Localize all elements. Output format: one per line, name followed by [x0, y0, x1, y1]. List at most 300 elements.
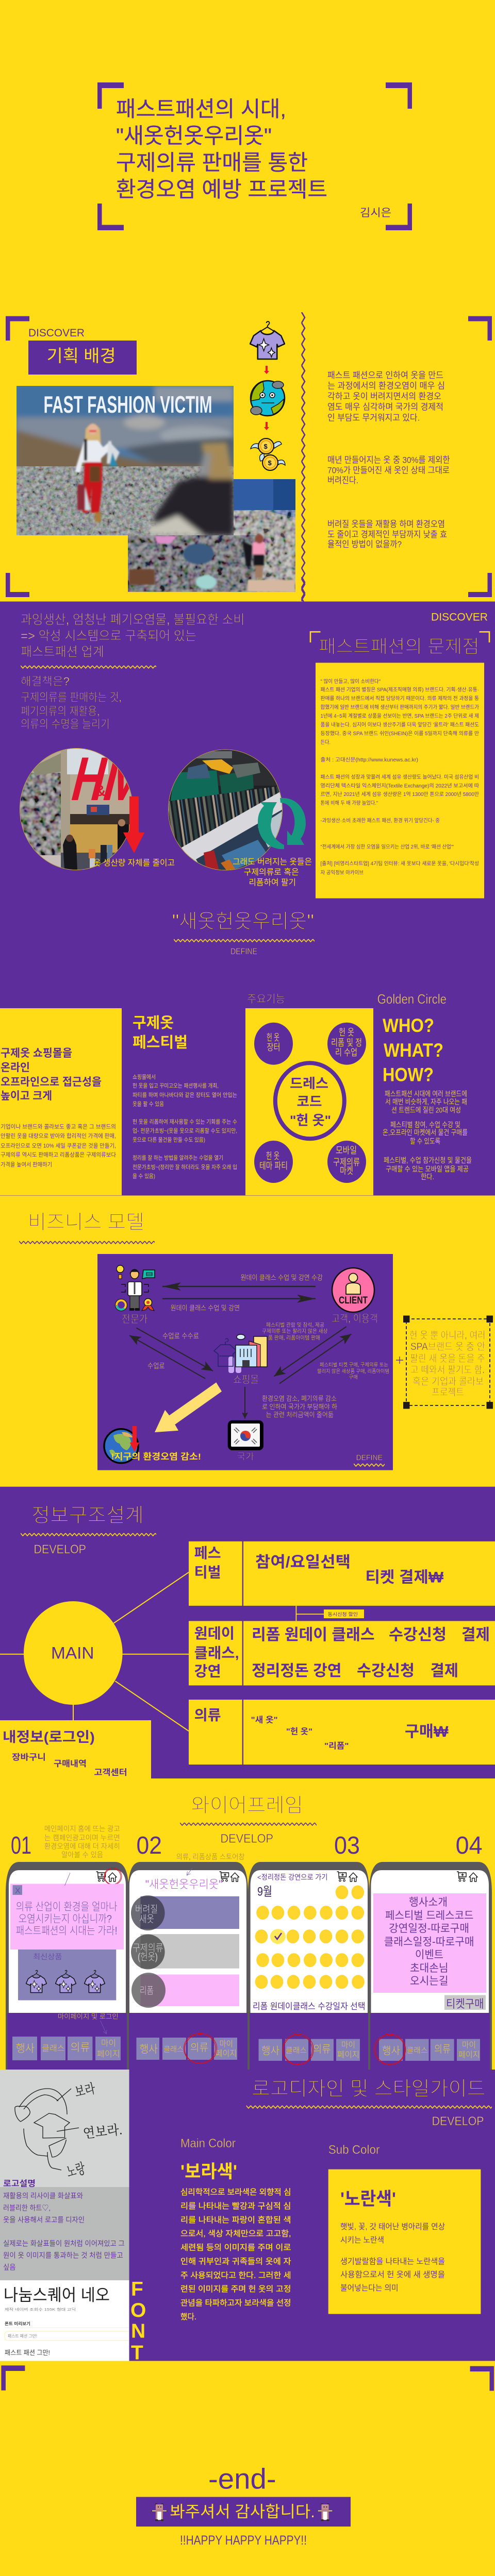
caption: resell clothes	[233, 857, 312, 887]
photo circle: H&M store: M	[97, 744, 155, 814]
panel: logo description: 싶음	[3, 2263, 16, 2271]
arrow: earth to money	[264, 422, 269, 430]
feature bubble: reform class: 헌 옷	[339, 1027, 354, 1038]
tab bar: 클래스	[42, 2044, 65, 2053]
text: overproduction heading: 과잉생산, 엄청난 폐기오염물, 불필요한 소비	[21, 613, 244, 627]
icon: cart	[457, 1872, 466, 1882]
highlight scribble	[281, 2033, 315, 2066]
panel: logo description: 로고설명	[3, 2179, 36, 2188]
category: used clothes: (헌옷)	[138, 1952, 158, 1963]
category: used clothes: 구제의류	[133, 1942, 163, 1954]
who text	[385, 1090, 467, 1114]
tab bar: 의류	[70, 2042, 90, 2054]
tab bar: 클래스	[286, 2046, 307, 2055]
ad popup: 패스트패션의 시대는 가라!	[16, 1925, 118, 1937]
panel heading	[1, 1047, 102, 1102]
category: used clothes	[131, 1934, 239, 1969]
heading: logo and style guide: 로고디자인 및 스타일가이드	[252, 2078, 486, 2100]
tab bar: 의류	[434, 2043, 451, 2055]
flow label: tuition: 수업료	[147, 1362, 165, 1370]
festival heading	[133, 1014, 188, 1051]
main color block: 련된 이미지를 주며 헌 옷의 고정	[180, 2284, 291, 2294]
row: one day class and lecture: 정리정돈 강연	[252, 1663, 341, 1680]
row: clothing: "리폼"	[324, 1741, 349, 1751]
screen numbers: 01	[11, 1832, 31, 1859]
icon: expert	[116, 1265, 155, 1311]
screen numbers: 02	[136, 1832, 162, 1859]
icon: earth	[104, 1429, 138, 1463]
annotation: campaign ad: 메인페이지 홈에 뜨는 광고	[44, 1825, 120, 1833]
annotation: storefront: 의류, 리폼상품 스토어창	[176, 1853, 245, 1861]
heading: business model: 비즈니스 모델	[28, 1212, 144, 1233]
text: question: 버려질 옷들을 재활용 하며 환경오염	[327, 519, 445, 529]
text: discarded clothes statistic: 70%가 만들어진 새 옷인 상태 그대로	[327, 466, 450, 476]
feature bubble: market	[254, 1023, 293, 1065]
icon: cart	[220, 1872, 229, 1882]
author name: 김시은	[360, 207, 391, 219]
ad popup: 오염시키는지 아십니까?	[19, 1913, 112, 1925]
label: customer: 고객, 이용객	[332, 1313, 378, 1325]
connector: simultaneous discount	[296, 1606, 364, 1621]
row: one day class and lecture: 수강신청	[389, 1626, 447, 1643]
panel: logo description: 러블리한 하트♡,	[3, 2204, 51, 2212]
panel: my info login: 구매내역	[54, 1759, 87, 1769]
callout: additional sourcing: 고 떼와서 팔기도 함.	[410, 1364, 485, 1376]
category: discarded new clothes: 새옷	[139, 1913, 154, 1925]
connector lines from main	[0, 1572, 189, 1731]
tab bar: 페이지	[97, 2049, 120, 2059]
how text	[384, 1156, 472, 1181]
festival body text: 헌 옷을 입고 꾸미고오는 패션행사를 개최,	[133, 1082, 219, 1089]
panel body text: 기업이나 브랜드와 콜라보도 좋고 혹은 그 브랜드의	[1, 1123, 116, 1130]
callout: additional sourcing: SPA브랜드 옷 중 안	[410, 1341, 485, 1352]
tab bar: 클래스	[163, 2045, 184, 2054]
icon: recycle arrows	[258, 798, 306, 849]
phone: calendar screen	[248, 1862, 369, 2070]
sub color block: '노란색'	[340, 2189, 396, 2209]
festival body text: 옷으로 다른 물건을 만들 수도 있음)	[133, 1137, 205, 1143]
callout: additional sourcing: 프로젝트	[432, 1387, 464, 1398]
main color block: 세련됨 등의 이미지를 주며 이로	[180, 2243, 291, 2252]
key features label: 주요기능	[247, 993, 285, 1005]
flow label: festival offer: 품 판매, 리폼아이템 판매	[268, 1335, 320, 1341]
how text: 페스티벌, 수업 참가신청 및 물건을	[384, 1156, 472, 1164]
callout: additional sourcing: 혹은 기업과 콜라보	[412, 1376, 484, 1387]
text: discarded clothes statistic	[327, 455, 450, 485]
tab bar	[379, 2039, 480, 2061]
panel: font preview: 패스트 패션 그만!	[5, 2349, 50, 2357]
row: one day class and lecture: 리폼 원데이 클래스	[252, 1626, 375, 1643]
article text one: 품을 내놓는다. 심지어 이보다 생산주기를 더욱 앞당긴 '울트라' 패스트 패션도	[321, 722, 479, 728]
arrow: customer to mall	[274, 1327, 346, 1376]
icon: home	[108, 1873, 117, 1882]
panel heading: 구제옷 쇼핑몰을	[1, 1047, 72, 1059]
callout: additional sourcing: 헌 옷 뿐 아니라, 여러	[409, 1330, 486, 1341]
icon: korean flag	[228, 1420, 263, 1450]
phone: event screen	[369, 1862, 492, 2070]
text: overproduction heading	[21, 613, 244, 659]
icon: home	[349, 1873, 357, 1882]
photo: fast fashion victim	[16, 386, 234, 535]
text: fast fashion pollution: 염도 매우 심각하며 국가의 경제적	[327, 402, 443, 412]
screen numbers	[11, 1832, 483, 1859]
event menu	[373, 1893, 486, 1993]
how text: 한다.	[421, 1173, 434, 1181]
sub color block: 사용함으로서 헌 옷에 새 생명을	[340, 2270, 445, 2279]
panel: online offline shopping mall	[0, 1008, 122, 1195]
text: solution: 폐기의류의 재활용,	[21, 705, 100, 718]
row: festival: 티켓 결제₩	[365, 1569, 444, 1586]
ad popup: 의류 산업이 환경을 얼마나	[16, 1901, 118, 1913]
cover title: 구제의류 판매를 통한	[116, 150, 308, 175]
text: question: 도 줄이고 경제적인 부담까지 낮출 효	[327, 530, 447, 539]
panel: business model diagram	[97, 1254, 393, 1470]
develop label: DEVELOP	[34, 1543, 86, 1556]
panel: my info login: 고객센터	[94, 1768, 127, 1777]
article text two: 영리단체 텍스타일 익스체인지(Textile Exchange)의 2022년 보고서에 따	[321, 783, 479, 789]
main color block: 주 사용되었다고 한다. 그러한 세	[180, 2270, 291, 2280]
photo circle: H&M store	[20, 748, 132, 870]
article text two: 패스트 패션의 성장과 맞물려 세계 섬유 생산량도 늘어났다. 미국 섬유산업 비	[321, 773, 479, 780]
text: question	[327, 519, 447, 549]
article text three: 자 공익정보 아카이브	[321, 870, 364, 876]
highlight scribble	[373, 2033, 407, 2066]
vertical word: font: F	[131, 2278, 143, 2300]
annotation arrow	[187, 1868, 192, 1875]
center ring: dress code: 드레스	[290, 1076, 328, 1091]
panel: golden circle: WHAT?	[384, 1040, 443, 1061]
center ring: dress code: "헌 옷"	[290, 1113, 331, 1128]
article text one: 합했기에 일반 브랜드에 비해 생산부터 판매까지의 주기가 짧다. 일반 브랜드가	[321, 704, 479, 710]
arrow: expert to mall	[136, 1328, 213, 1371]
center ring: dress code: 코드	[297, 1094, 322, 1109]
handwritten labels: 노랑	[65, 2160, 87, 2181]
text: solution: 해결책은?	[21, 675, 70, 688]
article text three: "전세계에서 가장 심한 오염을 일으키는 산업 2위, 바로 '패션 산업'"	[321, 843, 454, 850]
phone: home screen	[6, 1862, 129, 2070]
festival body text: 옷을 팔 수 있음	[133, 1100, 164, 1107]
flow label: class attendance: 원데이 클래스 수업 및 강연 수강	[240, 1274, 323, 1282]
panel: font preview: 제작 네이버 조회수 155K 형태 고딕	[5, 2307, 76, 2312]
plus sign	[396, 1357, 403, 1364]
callout: additional sourcing	[403, 1316, 493, 1409]
vertical word: font: T	[131, 2342, 143, 2364]
text: discarded clothes statistic: 버려진다.	[327, 476, 358, 485]
panel body text: 오프라인으로 오면 10% 세일 쿠폰같은 것을 만들기,	[1, 1142, 116, 1149]
section: information architecture	[0, 1487, 495, 1778]
month label: 9월	[257, 1885, 272, 1899]
panel: logo description	[0, 2179, 129, 2280]
flow label: festival offer: 구제의류 또는 팔리지 않은 새상	[262, 1328, 328, 1334]
flow label: reduced cost	[262, 1395, 337, 1419]
event menu: 초대손님	[410, 1962, 449, 1974]
new products	[18, 1950, 116, 2000]
handwritten labels: 연보라.	[82, 2122, 123, 2141]
row: festival: 페스	[194, 1545, 221, 1561]
article text three: [출처] [비영리스타트업] 4기팀 인터뷰: 새 옷보다 새로운 옷을, '다시입다'작성	[321, 860, 479, 867]
who text: 션 트렌드에 질린 20대 여성	[391, 1106, 461, 1114]
tab bar: 의류	[313, 2043, 331, 2055]
article text one: 패스트 패션 기업의 별칭은 SPA(제조직매형 의류) 브랜드다. 기획·생산·유통·	[321, 686, 479, 693]
label: shopping mall: 쇼핑몰	[233, 1374, 259, 1386]
icon: client: CLIENT	[339, 1295, 368, 1306]
sub color block: 햇빛, 꽃, 갓 태어난 병아리를 연상	[340, 2222, 445, 2231]
text: fast fashion pollution: 패스트 패션으로 인하여 옷을 만드	[327, 370, 443, 380]
zigzag rule	[21, 665, 156, 669]
panel: golden circle	[383, 1015, 472, 1181]
festival body text: 업- 전문가초빙~(옷을 옷으로 리폼할 수도 있지만,	[133, 1128, 237, 1134]
category: discarded new clothes	[131, 1895, 239, 1930]
what text: 할 수 있도록	[410, 1137, 440, 1145]
icon: flying coins: $	[268, 459, 272, 467]
service name title: "새옷헌옷우리옷"	[172, 911, 314, 933]
row: clothing: 구매₩	[405, 1723, 449, 1740]
feature bubble: theme party	[254, 1141, 293, 1183]
happy line: !!HAPPY HAPPY HAPPY!!	[180, 2533, 307, 2548]
row: one day class and lecture: 강연	[194, 1664, 221, 1680]
panel: font preview: 나눔스퀘어 네오	[4, 2286, 110, 2304]
arrow: mall to earth	[155, 1382, 222, 1432]
main color block: 인해 귀부인과 귀족들의 옷에 자	[180, 2257, 291, 2266]
callout: additional sourcing: 팔린 새 옷을 돈을 주	[410, 1353, 485, 1364]
vertical word: font: O	[130, 2299, 146, 2321]
article text one: 1년에 4~5회 계절별로 상품을 선보이는 반면, SPA 브랜드는 2주 단위로 새 제	[321, 713, 479, 719]
zigzag rule	[21, 1533, 156, 1536]
row: festival: 참여/요일선택	[255, 1554, 351, 1571]
highlight scribble	[183, 2032, 218, 2065]
panel: font preview: 패스트 패션 그만!	[8, 2333, 37, 2338]
festival body text: 쇼핑몰에서	[133, 1074, 156, 1080]
what text	[383, 1121, 468, 1145]
event menu: 이벤트	[415, 1949, 443, 1961]
panel: my info login: 장바구니	[12, 1753, 46, 1762]
tab bar: 페이지	[458, 2050, 480, 2060]
festival body text	[133, 1074, 237, 1179]
tab bar: 행사	[140, 2043, 158, 2056]
section: problems of fast fashion	[0, 602, 495, 1195]
panel: golden circle: WHO?	[383, 1015, 434, 1036]
festival body text: 을 수 있음)	[133, 1173, 155, 1179]
panel: logo description: 실제로는 화살표들이 원처럼 이어져있고 그	[3, 2240, 125, 2248]
heading box: planning background	[28, 341, 137, 375]
arrow: mall to customer	[279, 1334, 351, 1383]
row: clothing: "헌 옷"	[286, 1727, 312, 1736]
annotation arrows	[65, 1873, 106, 2034]
icon: shirt	[250, 321, 285, 359]
panel: key features diagram	[245, 1008, 373, 1195]
article text one: 출처 : 고대신문(http://www.kunews.ac.kr)	[321, 757, 418, 763]
arrow: decrease	[130, 1426, 139, 1452]
heading: problems of fast fashion: 패스트패션의 문제점	[319, 637, 480, 657]
icon: shopping mall	[214, 1334, 267, 1373]
tab bar: 행사	[382, 2045, 400, 2057]
end mark: -end-	[208, 2463, 276, 2495]
flow label: festival offer: 페스티벌 관람 및 참석, 제공	[266, 1322, 324, 1328]
sub color block: 시키는 노란색	[340, 2235, 384, 2245]
connector: simultaneous discount: 동시신청 할인	[328, 1612, 358, 1617]
panel: golden circle: HOW?	[383, 1064, 434, 1086]
festival body text: 전문가초빙~(정리만 잘 하더라도 옷을 자주 오래 입	[133, 1163, 237, 1171]
event menu: 행사소개	[409, 1896, 448, 1908]
annotation: campaign ad: 알아볼 수 있음	[61, 1851, 103, 1859]
highlight scribble	[103, 1867, 122, 1886]
define label: DEFINE	[230, 946, 257, 956]
icon: bear right	[318, 2503, 333, 2521]
define label: DEFINE	[356, 1453, 383, 1462]
sub color block: 불어넣는다는 의미	[340, 2283, 399, 2293]
tab bar: 마이	[341, 2041, 355, 2050]
icon: home	[469, 1873, 477, 1882]
panel: logo description: 원이 옷 이미지를 통과하는 것 처럼 만들고	[3, 2251, 123, 2260]
article text two: 르면, 지난 2021년 세계 섬유 생산량은 1억 1300만 톤으로 2000년 5800만	[321, 791, 479, 798]
tab bar: 의류	[190, 2042, 208, 2054]
flow label: festival offer	[262, 1322, 328, 1341]
panel body text	[1, 1123, 116, 1168]
caption: resell clothes: 그래도 버려지는 옷들은	[233, 857, 312, 867]
photo circle: clothes racks	[168, 750, 285, 876]
handwritten labels	[65, 2081, 123, 2181]
section: cover	[97, 82, 412, 230]
cover frame brackets	[97, 82, 412, 230]
panel: logo description: 옷을 사용해서 로고를 디자인	[3, 2215, 85, 2224]
article text two: -과잉생산·소비 초래한 패스트 패션, 환경 위기 앞당긴다- 중	[321, 817, 440, 824]
caption: date selection: 리폼 원데이클래스 수강일자 선택	[253, 2002, 365, 2011]
panel body text: 안팔린 옷을 대량으로 받아와 합리적인 가격에 판매,	[1, 1132, 116, 1139]
icon: cart	[337, 1872, 346, 1882]
discover label: DISCOVER	[431, 612, 488, 623]
article text one: 든다.	[321, 739, 331, 745]
golden circle label: Golden Circle	[377, 991, 447, 1007]
cover title	[116, 97, 327, 201]
festival body text: 헌 옷을 리폼하여 재사용할 수 있는 기회를 주는 수	[133, 1118, 237, 1125]
event menu: 오시는길	[410, 1975, 449, 1987]
event menu: 클래스일정-따로구매	[384, 1936, 474, 1948]
tab bar	[136, 2038, 237, 2060]
photo circle: H&M store: H	[65, 744, 114, 814]
feature bubble: mobile market: 모바일	[336, 1145, 357, 1156]
annotation: campaign ad: 환경오염에 대해 더 자세히	[44, 1842, 120, 1851]
ticket button: 티켓구매	[446, 1997, 484, 2010]
event menu: 강연일정-따로구매	[389, 1923, 469, 1935]
icon: client	[332, 1268, 374, 1312]
article text one: 판매를 하나의 브랜드에서 직접 담당하기 때문이다. 의류 제작의 전 과정을 통	[321, 695, 479, 702]
arrow: mall to expert	[129, 1335, 205, 1379]
hand-drawn logo	[15, 2089, 79, 2170]
who text: 패스트패션 시대에 여러 브랜드에	[385, 1090, 467, 1098]
label: nation: 국가	[237, 1452, 254, 1462]
feature bubble: theme party: 헌 옷	[266, 1151, 279, 1161]
flow label: tickets and purchase	[317, 1362, 389, 1380]
row: festival	[189, 1541, 495, 1606]
text: question: 율적인 방법이 없을까?	[327, 539, 402, 549]
caption: resell clothes: 리폼하여 팔기	[249, 878, 296, 887]
label: main color: Main Color	[180, 2137, 236, 2150]
cover title: 환경오염 예방 프로젝트	[116, 177, 327, 201]
tab bar: 마이	[462, 2041, 476, 2050]
icon: polluted earth	[251, 381, 285, 416]
tab bar	[12, 2037, 121, 2060]
row: clothing	[189, 1700, 495, 1765]
row: clothing: "새 옷"	[251, 1716, 278, 1725]
arrow: shirt to earth	[264, 366, 269, 374]
tab bar: 페이지	[216, 2049, 237, 2058]
main color block	[180, 2162, 291, 2321]
panel heading: 오프라인으로 접근성을	[1, 1076, 102, 1088]
screen numbers: 03	[334, 1832, 360, 1859]
feature bubble: reform class	[327, 1023, 366, 1065]
cover title: "새옷헌옷우리옷"	[116, 124, 272, 148]
vertical zigzag divider	[300, 312, 306, 601]
main color block: 심리학적으로 보라색은 외향적 심	[180, 2188, 291, 2197]
icon: bear left	[152, 2503, 167, 2521]
label: expert: 전문가	[122, 1313, 147, 1325]
event menu: 페스티벌 드레스코드	[385, 1910, 473, 1922]
zigzag rule	[19, 1241, 155, 1244]
row: one day class and lecture: 결제	[431, 1663, 458, 1680]
store title: "새옷헌옷우리옷"	[145, 1878, 223, 1891]
flow label: reduced cost: 환경오염 감소, 폐기의류 감소	[262, 1395, 337, 1402]
feature bubble: reform class: 리폼 및 정	[331, 1038, 362, 1048]
feature bubble: market: 헌 옷	[267, 1032, 279, 1043]
panel heading: 온라인	[1, 1062, 30, 1074]
panel: logo sketch	[0, 2070, 129, 2187]
photo: fast fashion victim: FAST FASHION VICTIM	[43, 391, 212, 418]
back link: <정리정돈 강연으로 가기	[257, 1873, 328, 1882]
arrow: mall to nation	[244, 1387, 245, 1419]
text: overproduction heading: 패스트패션 업계	[21, 645, 104, 659]
row: one day class and lecture: 클래스,	[194, 1645, 239, 1661]
section frame brackets	[6, 316, 492, 597]
panel heading: 높이고 크게	[1, 1090, 52, 1102]
tab bar: 행사	[261, 2045, 279, 2057]
zigzag divider tail	[300, 577, 306, 602]
flow label: tuition and fee: 수업료 수수료	[162, 1332, 199, 1340]
article text one: 등장했다. 중국 SPA 브랜드 쉬인(SHEIN)은 이를 5일까지 단축해 의류를 만	[321, 730, 479, 737]
article text two	[321, 773, 479, 824]
article text one: " 많이 만들고, 많이 소비한다"	[321, 679, 381, 685]
section: planning background	[6, 312, 492, 601]
text: fast fashion pollution: 각하고 옷이 버려지면서의 환경오	[327, 392, 441, 401]
thank you banner: 봐주셔서 감사합니다.	[170, 2503, 315, 2521]
flow label: tickets and purchase: 구매	[349, 1374, 358, 1380]
zigzag rule	[246, 2105, 492, 2109]
panel body text: 가격을 높여서 판매하기	[1, 1161, 52, 1168]
section: logo and style guide	[129, 2070, 495, 2361]
text: discarded clothes statistic: 매년 만들어지는 옷 중 30%를 제외한	[327, 455, 450, 465]
icon: cart	[96, 1872, 105, 1882]
how text: 구매할 수 있는 모바일 앱을 제공	[386, 1165, 469, 1173]
festival heading: 페스티벌	[133, 1034, 188, 1051]
caption: reduce production: 옷 생산량 자체를 줄이고	[93, 858, 175, 868]
panel: articles	[316, 663, 484, 899]
section: closing	[1, 2365, 494, 2576]
row: one day class and lecture	[189, 1621, 495, 1685]
annotation: campaign ad	[44, 1825, 120, 1859]
flow label: tickets and purchase: 페스티벌 티켓 구매, 구제의류 또는	[320, 1362, 388, 1368]
heading: wireframe: 와이어프레임	[191, 1795, 303, 1817]
text: fast fashion pollution: 는 과정에서의 환경오염이 매우 심	[327, 381, 445, 391]
category: reform	[131, 1973, 239, 2008]
tab bar: 행사	[16, 2043, 35, 2055]
flow label: reduced cost: 로 인하여 국가가 부담해야 하	[262, 1403, 337, 1411]
row: one day class and lecture: 결제	[461, 1626, 490, 1643]
text: fast fashion pollution	[327, 370, 445, 422]
icon: flying coins	[251, 438, 285, 470]
handwritten labels: 보라	[73, 2081, 96, 2100]
panel: my info login: 내정보(로그인)	[3, 1730, 95, 1745]
feature bubble: mobile market	[327, 1141, 366, 1183]
label: sub color: Sub Color	[328, 2143, 380, 2157]
